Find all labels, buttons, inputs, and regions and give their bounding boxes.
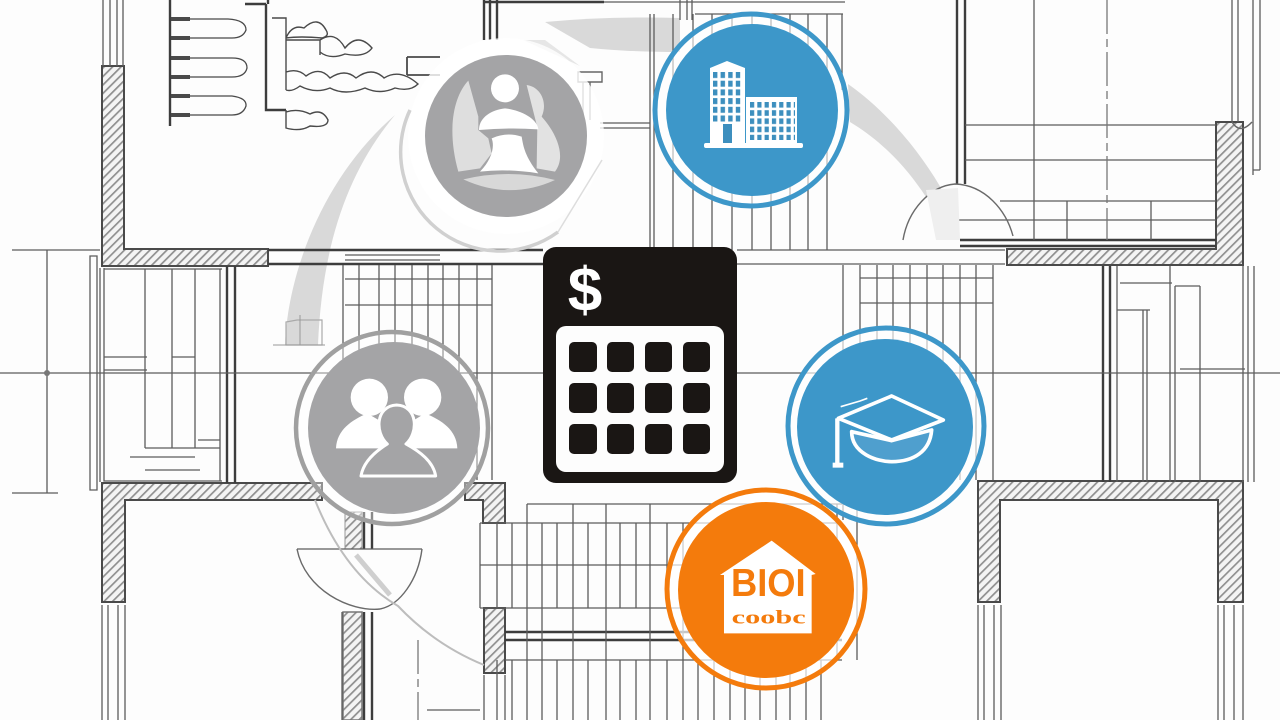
icon: blue circle with office buildings bbox=[655, 14, 847, 206]
icon: grey circle with seated figure bbox=[401, 38, 604, 251]
grey arc band behind icons bbox=[285, 18, 945, 345]
graduation cap glyph bbox=[833, 396, 943, 468]
house glyph with text bbox=[720, 541, 816, 633]
icon: central calculator bbox=[543, 247, 737, 483]
icon: orange circle with house label bbox=[667, 490, 865, 688]
house glyph with text: BIOI bbox=[731, 561, 806, 605]
calculator keypad bbox=[556, 326, 724, 472]
house glyph with text: coobc bbox=[732, 608, 806, 629]
people glyph bbox=[336, 379, 457, 476]
door swing arcs bbox=[297, 184, 1013, 609]
icon: blue circle with graduation cap bbox=[788, 328, 984, 524]
figure glyph bbox=[452, 74, 560, 190]
buildings glyph bbox=[704, 61, 803, 148]
icon: grey circle with three people bbox=[295, 331, 489, 525]
dollar sign: $ bbox=[568, 256, 602, 325]
top-left schematic loops bbox=[171, 18, 440, 130]
